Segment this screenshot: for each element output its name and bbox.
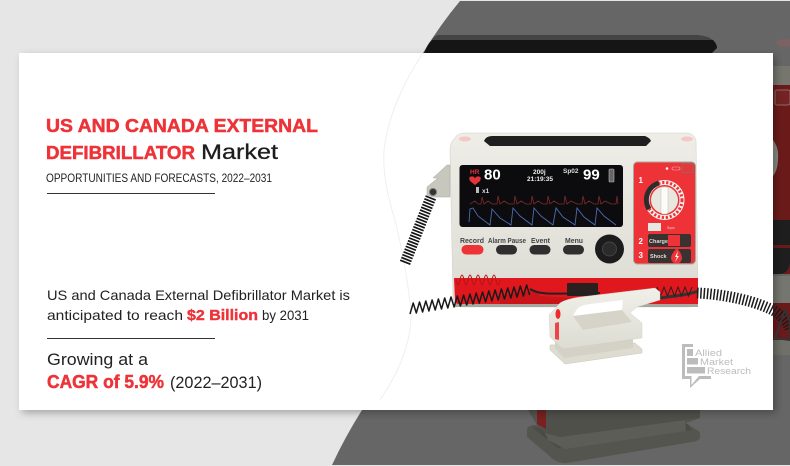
heading: Market (201, 141, 278, 164)
control buttons (460, 238, 584, 254)
growth callout: (2022–2031) (170, 373, 262, 392)
Allied Market Research logo: Allied (695, 348, 722, 359)
description text: $2 Billion (187, 307, 258, 324)
darkened background device (424, 35, 790, 463)
monitor screen: x1 (482, 188, 490, 195)
control buttons: Record (460, 238, 484, 245)
Allied Market Research logo: Research (707, 366, 751, 377)
control buttons: Alarm Pause (488, 238, 526, 245)
heading: US AND CANADA EXTERNAL (46, 115, 318, 136)
heading (46, 115, 318, 164)
monitor screen: 99 (583, 166, 600, 184)
red control panel: Shock (650, 254, 667, 260)
control buttons: Event (531, 238, 551, 245)
red base strip (454, 275, 698, 307)
monitor screen: Sp02 (563, 168, 579, 175)
monitor screen: 200j (533, 169, 546, 176)
monitor screen (460, 165, 623, 227)
red control panel: Sync (667, 226, 675, 230)
monitor screen: 21:19:35 (527, 176, 553, 183)
subtitle: OPPORTUNITIES AND FORECASTS, 2022–2031 (46, 173, 272, 185)
description text: anticipated to reach (47, 307, 183, 323)
red control panel: 1 (638, 176, 644, 185)
Allied Market Research logo: Market (700, 357, 733, 368)
white content panel (19, 53, 773, 410)
growth callout (47, 350, 262, 392)
defibrillator device (405, 133, 790, 364)
control buttons: Menu (565, 238, 583, 245)
growth callout: CAGR of 5.9% (47, 372, 164, 392)
coiled cables (405, 188, 790, 340)
defibrillator paddle (549, 288, 660, 364)
description text: US and Canada External Defibrillator Market is (47, 287, 350, 303)
monitor screen: 80 (484, 166, 501, 184)
growth callout: Growing at a (47, 350, 149, 369)
red control panel: 2 (638, 237, 644, 246)
side connector (427, 165, 450, 197)
carry handle (484, 136, 651, 146)
red control panel: 3 (638, 251, 644, 260)
red control panel (634, 162, 696, 264)
description text (47, 287, 350, 324)
monitor screen: HR (470, 169, 480, 176)
heading: DEFIBRILLATOR (46, 142, 195, 163)
device body (450, 133, 698, 307)
Allied Market Research logo (682, 344, 751, 388)
rotary knob (595, 234, 624, 264)
red control panel: Charge (649, 239, 668, 245)
description text: by 2031 (262, 307, 309, 323)
